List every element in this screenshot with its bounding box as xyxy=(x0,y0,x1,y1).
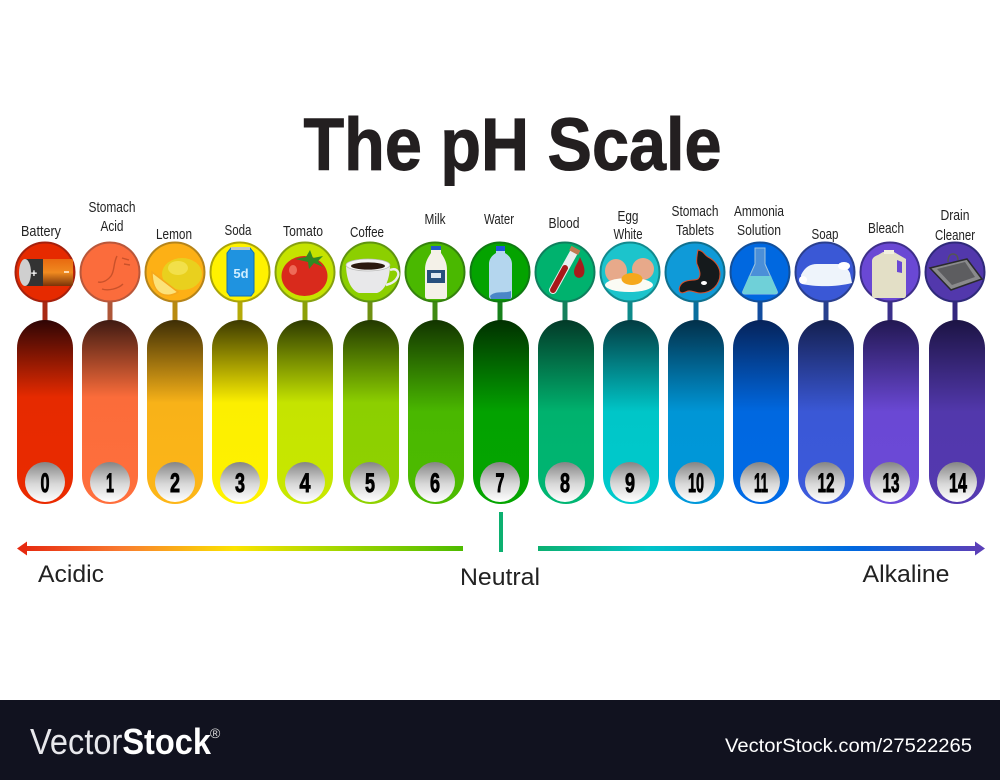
label: Stomach Tablets: Stomach xyxy=(672,203,718,220)
pill 1 xyxy=(82,320,138,504)
pill 11 xyxy=(733,320,789,504)
neutral marker xyxy=(499,512,503,552)
pill 10 xyxy=(668,320,724,504)
column 2: lemon xyxy=(146,226,204,504)
column 8: blood xyxy=(536,215,594,504)
label: Stomach Acid: Acid xyxy=(100,218,124,235)
pill 0 xyxy=(17,320,73,504)
label: Egg White: Egg xyxy=(618,208,638,225)
number 1: 1 xyxy=(106,468,114,498)
number 1 xyxy=(90,462,130,502)
label: Water: Water xyxy=(484,211,514,228)
pill 9 xyxy=(603,320,659,504)
pill 8 xyxy=(538,320,594,504)
number 11 xyxy=(740,462,780,502)
number 10: 10 xyxy=(688,468,704,498)
icon: cracked egg xyxy=(600,242,660,302)
label: Milk: Milk xyxy=(424,211,446,228)
pill 7 xyxy=(473,320,529,504)
pill 14 xyxy=(929,320,985,504)
registered mark: ® xyxy=(210,725,221,741)
label: Blood: Blood xyxy=(548,215,580,232)
number 12: 12 xyxy=(818,468,834,498)
label: Soda: Soda xyxy=(224,222,252,239)
pill 12 xyxy=(798,320,854,504)
label: Drain Cleaner: Drain xyxy=(940,207,970,224)
column 11: ammonia solution xyxy=(730,203,790,504)
column 9: egg white xyxy=(600,208,660,504)
number 6: 6 xyxy=(430,468,440,498)
label: Lemon: Lemon xyxy=(156,226,192,243)
label: Ammonia Solution xyxy=(734,203,785,239)
number 4: 4 xyxy=(300,468,310,498)
number 9 xyxy=(610,462,650,502)
column 13: bleach xyxy=(860,220,920,504)
pill 2 xyxy=(147,320,203,504)
label: Tomato: Tomato xyxy=(283,223,323,240)
icon: tomato xyxy=(276,242,334,302)
icon: battery xyxy=(16,242,74,302)
label: Ammonia Solution: Solution xyxy=(737,222,781,239)
icon: sink xyxy=(926,242,984,302)
footer logo: VectorStock xyxy=(30,721,212,762)
pill 4 xyxy=(277,320,333,504)
label: Stomach Tablets xyxy=(672,203,718,239)
number 6 xyxy=(415,462,455,502)
number 5 xyxy=(350,462,390,502)
icon: soap bar xyxy=(796,242,854,302)
icon: soda can: 5d xyxy=(233,266,249,281)
number 4 xyxy=(285,462,325,502)
column 7: water xyxy=(470,211,530,504)
number 9: 9 xyxy=(625,468,635,498)
number 0: 0 xyxy=(40,468,50,498)
number 13: 13 xyxy=(882,468,900,498)
label: Drain Cleaner: Cleaner xyxy=(935,227,975,244)
number 0 xyxy=(25,462,65,502)
number 11: 11 xyxy=(754,468,768,498)
label: Ammonia Solution: Ammonia xyxy=(734,203,785,220)
number 2: 2 xyxy=(170,468,180,498)
column 5: coffee xyxy=(340,224,400,504)
icon: soda can xyxy=(210,242,270,302)
label: Drain Cleaner xyxy=(935,207,975,244)
icon: bleach jug xyxy=(860,242,920,302)
label: Alkaline: Alkaline xyxy=(862,561,950,588)
alkaline arrow xyxy=(538,542,985,556)
label: Stomach Tablets: Tablets xyxy=(676,222,714,239)
number 8 xyxy=(545,462,585,502)
pill 3 xyxy=(212,320,268,504)
number 10 xyxy=(675,462,715,502)
label: Bleach: Bleach xyxy=(868,220,904,237)
column 6: milk xyxy=(406,211,464,504)
number 3 xyxy=(220,462,260,502)
column 0: battery xyxy=(16,223,74,504)
column 1: stomach acid xyxy=(80,199,140,504)
icon: battery: + xyxy=(31,268,37,280)
label: Coffee: Coffee xyxy=(350,224,384,241)
number 14 xyxy=(937,462,977,502)
footer url: VectorStock.com/27522265 xyxy=(725,736,972,757)
icon: stomach acid xyxy=(80,242,140,302)
pill 5 xyxy=(343,320,399,504)
icon: blood tube xyxy=(536,242,594,302)
number 14: 14 xyxy=(949,468,967,498)
number 2 xyxy=(155,462,195,502)
column 4: tomato xyxy=(276,223,334,504)
label: Stomach Acid: Stomach xyxy=(88,199,136,216)
column 10: stomach tablets xyxy=(666,203,724,504)
number 5: 5 xyxy=(365,468,375,498)
label: Soap: Soap xyxy=(812,226,838,243)
column 3: soda xyxy=(210,222,270,504)
number 13 xyxy=(870,462,910,502)
number 7 xyxy=(480,462,520,502)
label: Acidic: Acidic xyxy=(38,561,104,588)
pill 6 xyxy=(408,320,464,504)
icon: flask xyxy=(730,242,790,302)
label: Battery: Battery xyxy=(21,223,61,240)
number 3: 3 xyxy=(235,468,245,498)
icon: water bottle xyxy=(470,242,530,302)
number 12 xyxy=(805,462,845,502)
icon: stomach xyxy=(666,242,724,302)
column 14: drain cleaner xyxy=(926,207,985,504)
title: The pH Scale xyxy=(304,103,722,186)
icon: lemon xyxy=(146,242,204,302)
label: Egg White: White xyxy=(614,226,642,243)
column 12: soap xyxy=(796,226,854,504)
icon: milk bottle xyxy=(406,242,464,302)
label: Stomach Acid xyxy=(88,199,136,235)
number 8: 8 xyxy=(560,468,570,498)
label: Neutral: Neutral xyxy=(460,564,540,591)
footer bar xyxy=(0,700,1000,780)
number 7: 7 xyxy=(496,468,504,498)
pill 13 xyxy=(863,320,919,504)
label: Egg White xyxy=(614,208,642,243)
icon: coffee cup xyxy=(340,242,400,302)
acidic arrow xyxy=(17,542,463,556)
